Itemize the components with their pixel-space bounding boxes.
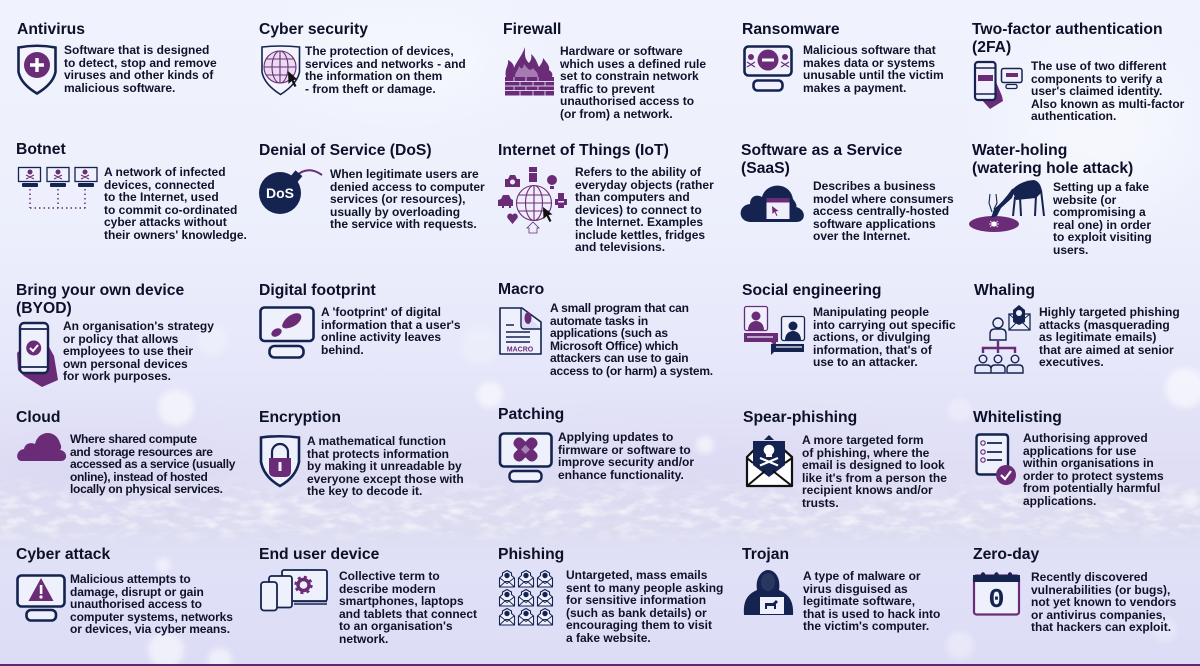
icon: profiles and speech bubbles	[744, 306, 806, 356]
text: applications.	[1023, 494, 1096, 508]
heading: Macro	[498, 281, 544, 298]
heading: (SaaS)	[741, 160, 790, 176]
text: the Internet. Examples	[575, 215, 703, 229]
icon: monitor with bandage	[499, 432, 553, 483]
text: accessed as a service (usually	[70, 457, 235, 471]
icon: globe surrounded by connected things	[498, 167, 567, 234]
text: Setting up a fake	[1053, 180, 1149, 194]
text: the information on them	[305, 69, 442, 83]
heading: Internet of Things (IoT)	[498, 142, 669, 159]
text: to exploit visiting	[1053, 230, 1152, 244]
text: online), instead of hosted	[70, 470, 208, 484]
text	[575, 165, 714, 254]
text: Malicious software that	[803, 43, 936, 57]
text: and tablets that connect	[339, 606, 477, 620]
heading: Denial of Service (DoS)	[259, 142, 432, 159]
text: (such as bank details) or	[566, 606, 707, 620]
text: from potentially harmful	[1023, 481, 1160, 495]
panel: Zero-day	[973, 546, 1178, 636]
text: or devices, via cyber means.	[70, 622, 230, 636]
text: that protects information	[307, 446, 449, 460]
panel: Whitelisting	[973, 409, 1178, 511]
heading: Spear-phishing	[743, 409, 857, 426]
text: describe modern	[339, 582, 436, 596]
text: like it's from a person the	[802, 470, 947, 484]
heading: Patching	[498, 406, 564, 423]
icon: macro document: MACRO	[507, 346, 534, 354]
text: network.	[339, 632, 388, 646]
text: Where shared compute	[70, 432, 197, 446]
text: firmware or software to	[558, 442, 691, 456]
text	[64, 43, 217, 94]
text	[1053, 180, 1152, 256]
heading: Antivirus	[17, 21, 85, 38]
heading: Cloud	[16, 409, 60, 426]
text: to detect, stop and remove	[64, 56, 217, 70]
text	[339, 570, 477, 645]
text: The protection of devices,	[305, 44, 454, 58]
text: website (or	[1053, 192, 1116, 206]
footer bar	[0, 664, 1200, 666]
text: everyone except those with	[307, 472, 464, 486]
panel: Bring your own device	[16, 282, 536, 387]
text: services and networks - and	[305, 56, 466, 70]
text: their owners' knowledge.	[104, 228, 247, 242]
panel: Cyber security	[259, 21, 466, 96]
text: Describes a business	[813, 179, 936, 193]
text: the victim's computer.	[803, 619, 929, 633]
text: that is used to hack into	[803, 606, 940, 620]
icon: shield with plus	[17, 44, 57, 95]
text	[1031, 59, 1184, 123]
text: users.	[1053, 242, 1088, 256]
text: A mathematical function	[307, 434, 446, 448]
text	[558, 431, 694, 481]
text: actions, or divulging	[813, 330, 930, 344]
text	[813, 306, 956, 368]
text: that hackers can exploit.	[1031, 620, 1171, 634]
text	[1039, 306, 1180, 368]
text: a fake website.	[566, 630, 651, 644]
text: to an organisation's	[339, 619, 453, 633]
icon: shield with padlock	[260, 435, 301, 488]
text: unauthorised access to	[560, 94, 694, 108]
text: Manipulating people	[813, 305, 929, 319]
text: computer systems, networks	[70, 610, 233, 624]
text: Also known as multi-factor	[1031, 96, 1184, 110]
panel: Encryption	[259, 409, 474, 499]
heading: (2FA)	[972, 38, 1011, 56]
heading: Cyber attack	[16, 546, 110, 563]
text: model where consumers	[813, 192, 954, 206]
text: locally on physical services.	[70, 482, 223, 496]
text: everyday objects (rather	[575, 178, 714, 192]
text: the service with requests.	[330, 217, 477, 231]
text: authentication.	[1031, 109, 1116, 123]
icon: monitor with footprint	[259, 306, 315, 359]
panel: Social engineering	[742, 282, 957, 372]
icon: monitor with warning triangle	[16, 574, 67, 622]
text: applications (such as	[550, 326, 668, 340]
text	[813, 179, 954, 243]
text: Microsoft Office) which	[550, 338, 678, 352]
text: viruses and other kinds of	[64, 68, 213, 82]
text	[70, 433, 235, 496]
text: trusts.	[802, 496, 839, 510]
heading: Bring your own device	[16, 282, 184, 299]
text: makes a payment.	[803, 80, 906, 94]
text: the key to decode it.	[307, 484, 422, 498]
text: improve security and/or	[558, 455, 694, 469]
text: Applying updates to	[558, 430, 673, 444]
heading: Two-factor authentication	[972, 21, 1163, 38]
text: cyber attacks without	[104, 215, 227, 229]
text: to the Internet, used	[104, 190, 219, 204]
heading	[16, 282, 184, 316]
icon: laptop, tablet and phone	[260, 569, 329, 612]
text: not yet known to vendors	[1031, 595, 1176, 609]
text: virus disguised as	[803, 582, 908, 596]
text: A network of infected	[104, 165, 226, 179]
heading	[972, 21, 1163, 56]
text: user's claimed identity.	[1031, 84, 1162, 98]
icon: hooded hacker with trojan horse laptop	[743, 569, 795, 616]
heading: Whaling	[974, 282, 1035, 299]
text: attackers can use to gain	[550, 351, 688, 365]
icon: calendar with zero: 0	[988, 586, 1005, 616]
icon: networked infected monitors	[18, 166, 98, 209]
text	[803, 43, 944, 94]
panel: Spear-phishing	[743, 409, 948, 511]
panel: Whaling	[974, 282, 1184, 376]
panel: Digital footprint	[259, 282, 461, 359]
icon: monitor with stop sign and skulls	[743, 45, 793, 92]
text	[104, 165, 247, 242]
text: A type of malware or	[803, 569, 921, 583]
text: and televisions.	[575, 240, 665, 254]
text: Authorising approved	[1023, 431, 1148, 445]
text: makes data or systems	[803, 56, 935, 70]
text: denied access to computer	[330, 180, 485, 194]
heading: Ransomware	[742, 21, 840, 38]
text: legitimate software,	[803, 594, 915, 608]
text: over the Internet.	[813, 229, 910, 243]
panel: Firewall	[503, 21, 706, 120]
text: vulnerabilities (or bugs),	[1031, 582, 1170, 596]
icon: calendar with zero	[973, 572, 1020, 616]
heading: Trojan	[742, 546, 789, 563]
text: include kettles, fridges	[575, 228, 705, 242]
text: sent to many people asking	[566, 580, 723, 594]
text: (or from) a network.	[560, 106, 673, 120]
text	[802, 434, 947, 509]
text: components to verify a	[1031, 72, 1162, 86]
icon: DoS bomb	[259, 169, 322, 214]
heading: Software as a Service	[741, 142, 902, 159]
text: information that a user's	[321, 318, 461, 332]
heading: Botnet	[16, 141, 66, 158]
icon: cloud with browser window	[740, 186, 804, 222]
text: real one) in order	[1053, 218, 1151, 232]
text: Collective term to	[339, 569, 440, 583]
panel: Cloud	[16, 409, 241, 499]
panel: Ransomware	[742, 21, 944, 94]
text: Highly targeted phishing	[1039, 305, 1180, 319]
text	[307, 435, 464, 498]
icon: phone in hand and small monitor	[974, 60, 1023, 109]
text: for sensitive information	[566, 593, 706, 607]
text	[1023, 432, 1164, 507]
text: access to (or harm) a system.	[550, 364, 713, 378]
text: information, that's of	[813, 342, 932, 356]
text: damage, disrupt or gain	[70, 584, 204, 598]
icon: grid of skull envelopes	[498, 569, 563, 629]
icon: envelope with skull	[745, 434, 795, 489]
panel: Trojan	[742, 546, 947, 636]
text: into carrying out specific	[813, 318, 956, 332]
text: applications for use	[1023, 444, 1136, 458]
text: order to protect systems	[1023, 468, 1164, 482]
text: executives.	[1039, 355, 1104, 369]
icon: checklist with check badge	[975, 433, 1017, 487]
panel: Patching	[498, 406, 708, 484]
text: and storage resources are	[70, 444, 213, 458]
text: unusable until the victim	[803, 68, 944, 82]
panel: End user device	[259, 546, 479, 646]
text: by making it unreadable by	[307, 459, 462, 473]
panel: Two-factor authentication	[972, 21, 1184, 123]
heading: Water-holing	[972, 142, 1067, 159]
heading: Firewall	[503, 21, 561, 38]
icon: phone in hand with check	[17, 322, 58, 387]
text: Untargeted, mass emails	[566, 568, 707, 582]
text: which uses a defined rule	[560, 56, 706, 70]
text: - from theft or damage.	[305, 82, 436, 96]
heading	[972, 142, 1133, 176]
text: When legitimate users are	[330, 167, 479, 181]
heading: Social engineering	[742, 282, 881, 299]
text: Refers to the ability of	[575, 165, 701, 179]
text: Recently discovered	[1031, 570, 1148, 584]
text: access centrally-hosted	[813, 204, 949, 218]
text	[330, 167, 485, 231]
text	[321, 305, 461, 356]
text: devices, connected	[104, 178, 215, 192]
panel: Phishing	[498, 546, 723, 646]
text: behind.	[321, 342, 364, 356]
text	[63, 319, 214, 383]
text: Malicious attempts to	[70, 572, 191, 586]
text: use to an attacker.	[813, 355, 918, 369]
icon: DoS bomb: DoS	[266, 185, 294, 201]
text: own personal devices	[63, 356, 188, 370]
text: The use of two different	[1031, 59, 1166, 73]
text: of phishing, where the	[802, 446, 929, 460]
text: A 'footprint' of digital	[321, 305, 441, 319]
text	[305, 44, 466, 96]
text	[560, 44, 706, 120]
panel: Water-holing	[969, 142, 1152, 256]
heading: End user device	[259, 546, 379, 563]
text: A small program that can	[550, 301, 689, 315]
text: to commit co-ordinated	[104, 202, 237, 216]
heading	[741, 142, 902, 176]
heading: Digital footprint	[259, 282, 376, 299]
text: malicious software.	[64, 80, 175, 94]
text	[566, 569, 723, 644]
text: traffic to prevent	[560, 82, 655, 96]
text: An organisation's strategy	[63, 319, 214, 333]
text: for work purposes.	[63, 369, 171, 383]
text: attacks (masquerading	[1039, 318, 1170, 332]
icon: purple cloud	[17, 432, 67, 462]
text: email is designed to look	[802, 458, 945, 472]
text: services (or resources),	[330, 192, 465, 206]
heading: Whitelisting	[973, 409, 1062, 426]
heading: Phishing	[498, 546, 564, 563]
icon: macro document	[499, 306, 542, 356]
panel: Botnet	[16, 141, 247, 242]
text: compromising a	[1053, 205, 1146, 219]
text: smartphones, laptops	[339, 594, 464, 608]
text	[803, 570, 940, 632]
icon: org chart with targeted executive	[974, 305, 1034, 375]
text: within organisations in	[1023, 456, 1154, 470]
text: as legitimate emails)	[1039, 330, 1156, 344]
icon: flames over brick wall	[505, 47, 554, 96]
text	[550, 302, 713, 377]
text: or antivirus companies,	[1031, 608, 1166, 622]
text: enhance functionality.	[558, 468, 684, 482]
text: usually by overloading	[330, 204, 460, 218]
text: devices) to connect to	[575, 202, 702, 216]
icon: deer drinking at poisoned pool	[969, 180, 1045, 232]
panel: Software as a Service	[740, 142, 954, 243]
text: automate tasks in	[550, 314, 648, 328]
panel: Macro	[498, 281, 718, 381]
panel: Denial of Service	[259, 142, 485, 231]
panel: Antivirus	[17, 21, 217, 95]
heading: (watering hole attack)	[972, 160, 1133, 176]
icon: shield with globe and cursor	[261, 45, 300, 96]
text: than computers and	[575, 190, 690, 204]
panel: Cyber attack	[16, 546, 241, 636]
text: encouraging them to visit	[566, 618, 712, 632]
panel: Internet of Things	[498, 142, 714, 254]
text: online activity leaves	[321, 330, 441, 344]
text	[1031, 571, 1176, 634]
heading: (BYOD)	[16, 300, 72, 316]
text: Software that is designed	[64, 43, 209, 57]
text: or policy that allows	[63, 332, 178, 346]
text: recipient knows and/or	[802, 483, 933, 497]
text: set to constrain network	[560, 69, 699, 83]
text: that are aimed at senior	[1039, 342, 1174, 356]
heading: Zero-day	[973, 546, 1039, 563]
text: Hardware or software	[560, 44, 683, 58]
text: unauthorised access to	[70, 597, 202, 611]
text: software applications	[813, 216, 936, 230]
text: A more targeted form	[802, 433, 924, 447]
text	[70, 573, 233, 636]
text: employees to use their	[63, 344, 193, 358]
heading: Encryption	[259, 409, 341, 426]
heading: Cyber security	[259, 21, 368, 38]
